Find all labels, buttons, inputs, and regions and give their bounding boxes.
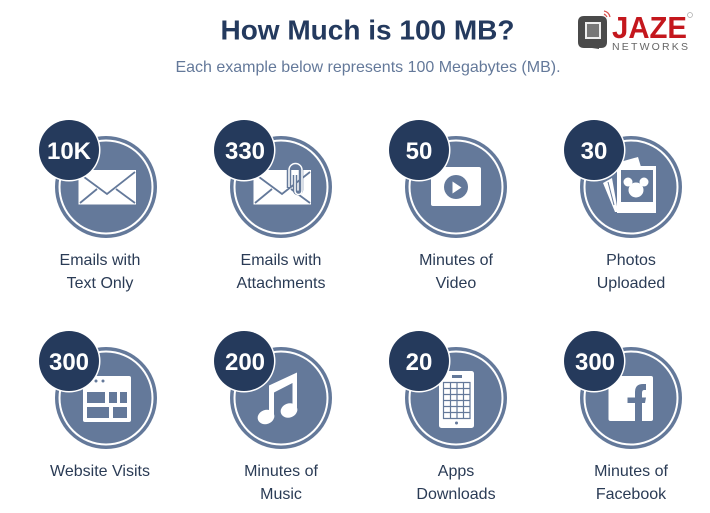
item: 20 apps downloads: [388, 330, 507, 503]
label: Uploaded: [597, 275, 665, 292]
label: Emails with: [241, 252, 321, 269]
icon: music notes: [256, 372, 299, 426]
item: 200 minutes of music: [212, 330, 332, 503]
icon: ring: [55, 136, 157, 238]
label: Music: [260, 486, 302, 503]
badge: 10K: 10K: [47, 138, 92, 165]
icon: ring: [580, 347, 682, 449]
label: Facebook: [596, 486, 667, 503]
badge: 30: [562, 118, 626, 182]
logo: Jaze Networks: [578, 10, 692, 53]
badge: 300: [38, 330, 100, 392]
badge: 300: [562, 330, 626, 392]
icon: ring: [580, 136, 682, 238]
logo: Jaze Networks: NETWORKS: [612, 41, 688, 53]
badge: 30: 30: [581, 138, 607, 165]
label: Attachments: [237, 275, 325, 292]
title: How Much is 100 MB?: [220, 14, 515, 46]
label: Apps: [438, 463, 474, 480]
badge: 300: 300: [49, 349, 89, 376]
icon: envelope with paperclip: [254, 164, 311, 204]
icon: ring: [230, 347, 332, 449]
icon: browser window: [83, 376, 131, 422]
item: 300 minutes of facebook: [562, 330, 682, 503]
badge: 20: 20: [406, 349, 432, 376]
badge: 200: 200: [225, 349, 265, 376]
badge: 300: 300: [575, 349, 615, 376]
icon: ring: [405, 347, 507, 449]
label: Minutes of: [419, 252, 493, 269]
label: Emails with: [60, 252, 140, 269]
badge: 330: [212, 118, 276, 182]
subtitle: Each example below represents 100 Megabytes (MB).: [175, 59, 561, 76]
item: 30 photos uploaded: [562, 118, 682, 292]
icon: facebook logo: [608, 376, 653, 421]
icon: ring: [230, 136, 332, 238]
item: 300 website visits: [38, 330, 157, 480]
badge: 10K: [38, 118, 100, 182]
icon: photos: [603, 157, 656, 213]
icon: video player: [431, 167, 481, 206]
label: Text Only: [67, 275, 133, 292]
icon: phone with app grid: [439, 371, 474, 428]
item: 330 emails with attachments: [212, 118, 332, 292]
badge: 50: [388, 118, 450, 182]
label: Minutes of: [594, 463, 668, 480]
label: Video: [436, 275, 476, 292]
label: Photos: [606, 252, 656, 269]
item: 10K emails with text only: [38, 118, 157, 292]
label: Minutes of: [244, 463, 318, 480]
badge: 200: [212, 330, 276, 392]
icon: ring: [55, 347, 157, 449]
badge: 330: 330: [225, 138, 265, 165]
icon: ring: [405, 136, 507, 238]
label: Downloads: [416, 486, 496, 503]
logo: Jaze Networks: JAZE: [612, 10, 687, 45]
item: 50 minutes of video: [388, 118, 507, 292]
icon: envelope: [78, 170, 136, 204]
badge: 20: [388, 330, 450, 392]
badge: 50: 50: [406, 138, 432, 165]
label: Website Visits: [50, 463, 150, 480]
